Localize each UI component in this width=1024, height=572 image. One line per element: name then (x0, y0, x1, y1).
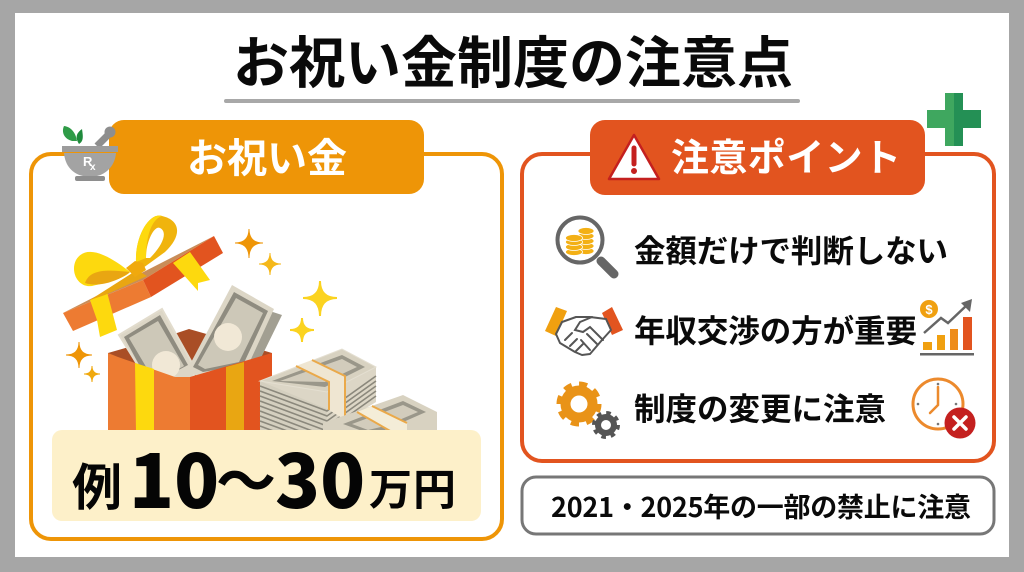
bill right (187, 285, 282, 378)
icon: green cross (927, 93, 981, 146)
amount banner (52, 423, 481, 530)
item: salary negotiation is more important (545, 299, 974, 356)
icon: clock with cross (913, 379, 976, 438)
illustration: money stacks (260, 349, 437, 432)
heading tab: celebration money (109, 120, 424, 194)
title: お祝い金制度の注意点 (233, 19, 793, 100)
icon: gears (560, 384, 618, 437)
icon: handshake (545, 307, 623, 355)
heading tab: caution points (590, 120, 925, 195)
item: do not judge by amount only (558, 218, 948, 274)
icon: rising chart with dollar coin: $ (925, 302, 933, 317)
amount banner: 万円 (369, 456, 456, 518)
icon: mortar and pestle (62, 126, 118, 181)
box front (108, 353, 190, 432)
icon: rising chart with dollar coin (920, 299, 974, 356)
icon: mortar and pestle: R (83, 154, 93, 169)
ribbon (90, 292, 117, 337)
item: do not judge by amount only: 金額だけで判断しない (634, 226, 948, 272)
heading tab: celebration money: お祝い金 (187, 126, 347, 184)
note box (522, 477, 994, 534)
amount banner: 10 (129, 423, 219, 530)
amount banner: 30 (275, 423, 365, 530)
amount banner: 例 (72, 448, 122, 520)
sparkles (66, 229, 337, 382)
panel: caution points (522, 154, 994, 461)
icon: mortar and pestle: x (90, 162, 96, 173)
item: beware of system changes: 制度の変更に注意 (634, 384, 886, 430)
amount banner: 〜 (216, 434, 276, 521)
item: salary negotiation is more important: 年収交渉の方が重要 (634, 306, 917, 352)
illustration: open gift box with money (63, 216, 282, 432)
box inside back (108, 329, 272, 385)
lid (63, 236, 214, 313)
icon: warning triangle (609, 135, 659, 179)
heading tab: caution points: 注意ポイント (671, 127, 901, 182)
panel: celebration money (31, 154, 502, 539)
bill left (119, 309, 196, 385)
icon: magnifier with coins (558, 218, 614, 274)
note box: 2021・2025年の一部の禁止に注意 (551, 486, 971, 525)
item: beware of system changes (560, 379, 976, 438)
